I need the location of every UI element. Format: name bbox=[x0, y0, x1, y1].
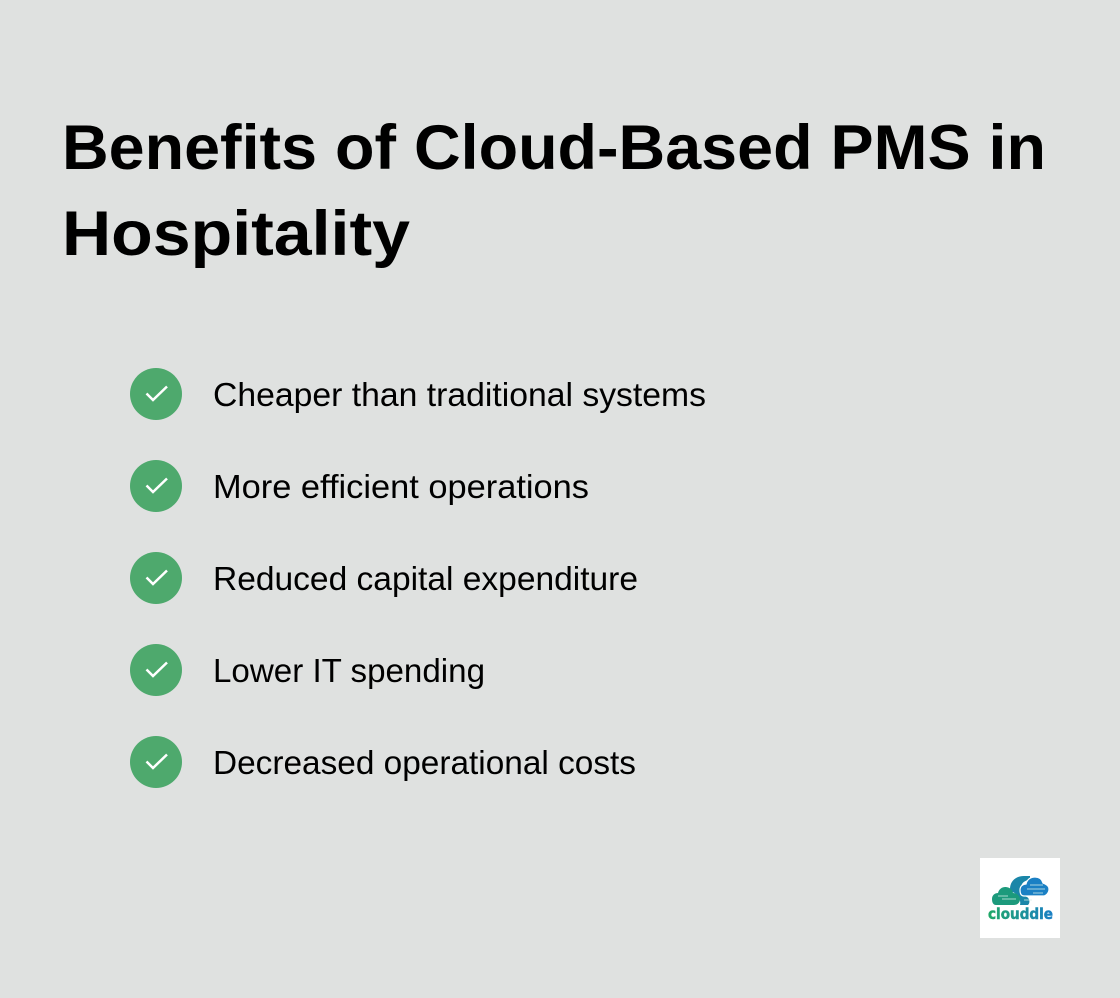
item: reduced capital expenditure: Reduced capital expenditure bbox=[213, 560, 638, 597]
item: more efficient operations bbox=[130, 460, 589, 512]
item: cheaper than traditional systems bbox=[130, 368, 706, 420]
title: Hospitality bbox=[62, 199, 410, 269]
logo: clouddle bbox=[980, 858, 1060, 938]
icon: circuit lines bbox=[998, 885, 1045, 900]
item: decreased operational costs: Decreased operational costs bbox=[213, 744, 636, 781]
icon: back swirl bbox=[1010, 876, 1030, 905]
title bbox=[62, 113, 1046, 269]
item: cheaper than traditional systems: Cheaper than traditional systems bbox=[213, 376, 706, 413]
title: Benefits of Cloud-Based PMS in bbox=[62, 113, 1046, 183]
item: decreased operational costs bbox=[130, 736, 636, 788]
item: more efficient operations: More efficient operations bbox=[213, 468, 589, 505]
icon: front cloud bbox=[992, 887, 1020, 905]
logo wordmark: clouddle bbox=[988, 905, 1053, 923]
item: lower IT spending bbox=[130, 644, 485, 696]
item: lower IT spending: Lower IT spending bbox=[213, 652, 485, 689]
icon: right cloud bbox=[1020, 877, 1049, 896]
benefits list bbox=[130, 368, 706, 788]
item: reduced capital expenditure bbox=[130, 552, 638, 604]
